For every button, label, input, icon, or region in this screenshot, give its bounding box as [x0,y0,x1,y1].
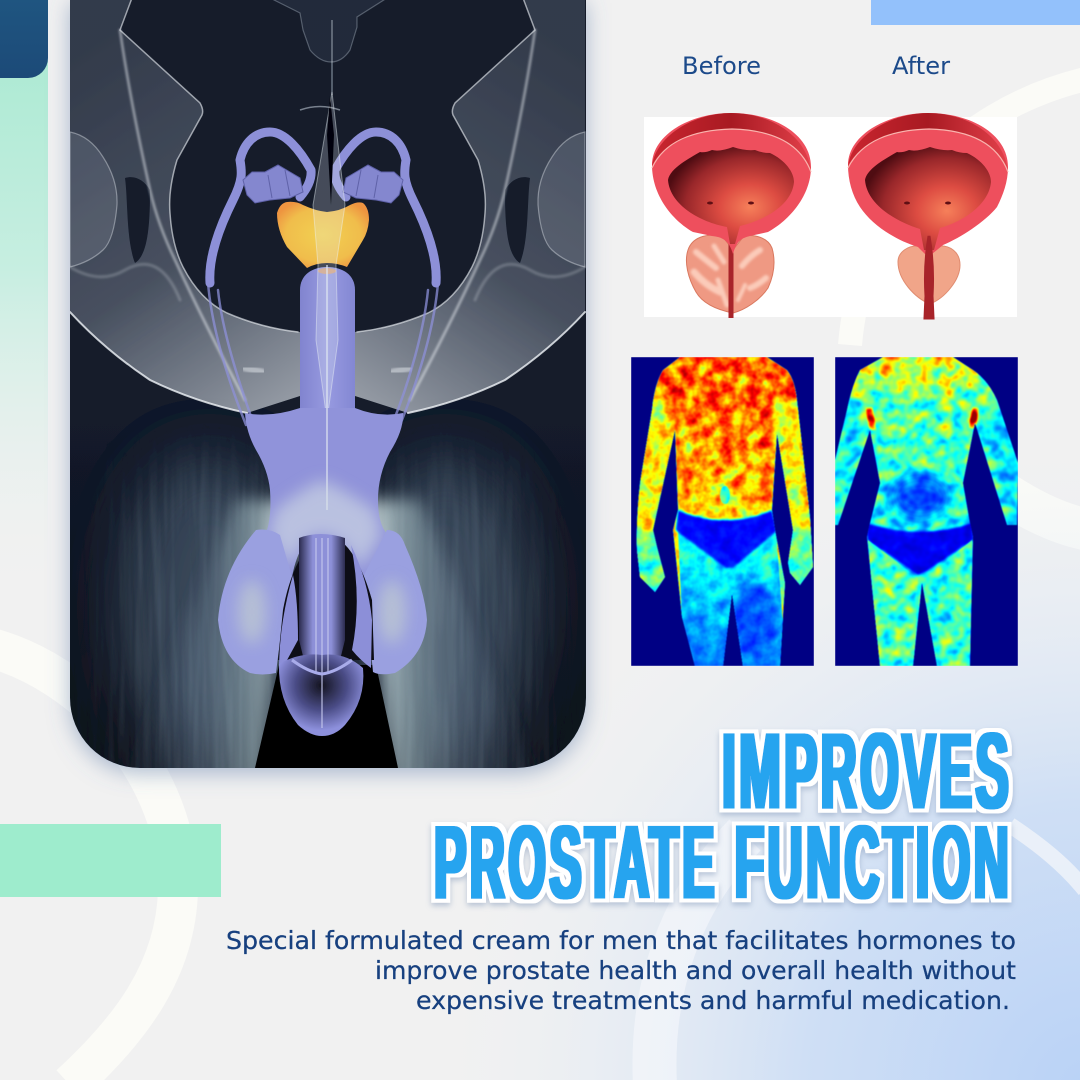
before bladder and enlarged prostate [652,113,811,318]
after bladder and normal prostate [848,113,1008,318]
prostate gland highlight [277,202,369,268]
panel: bladder comparison [644,113,1017,318]
pelvic bones ghost right [355,0,585,413]
mint accent bar [0,824,221,897]
central dark slot [278,535,374,660]
description text: improve prostate health and overall health without [375,956,1016,985]
mint side strip [0,0,48,600]
title [434,710,1012,921]
description text: Special formulated cream for men that facilitates hormones to [226,926,1016,955]
lower oval form [279,538,363,736]
central column [300,267,355,408]
label: after: After [892,52,950,80]
pale haze over tissue [268,480,382,570]
thermal map: before [631,357,814,666]
seminal vesicles [243,165,403,203]
panel background [70,0,586,770]
description text: expensive treatments and harmful medication. [416,986,1010,1015]
central line [326,265,328,510]
panel: anatomy x-ray [70,0,586,830]
top right blue bar [871,0,1080,25]
pale centres of oval forms [238,580,406,644]
right oval form [363,530,427,674]
dark blue corner block [0,0,48,78]
lower leg haze [90,460,560,830]
lower tissue form [245,408,403,577]
side crescents [279,545,372,668]
pelvic bones ghost left [70,0,300,413]
thermal map: after [835,357,1018,666]
left oval form [218,530,292,674]
central translucent wedge [300,20,345,420]
vas deferens loops [208,132,438,425]
central shaft [299,534,345,660]
description text [226,926,1016,1015]
top funnel outline [270,0,387,62]
label: before: Before [682,52,761,80]
